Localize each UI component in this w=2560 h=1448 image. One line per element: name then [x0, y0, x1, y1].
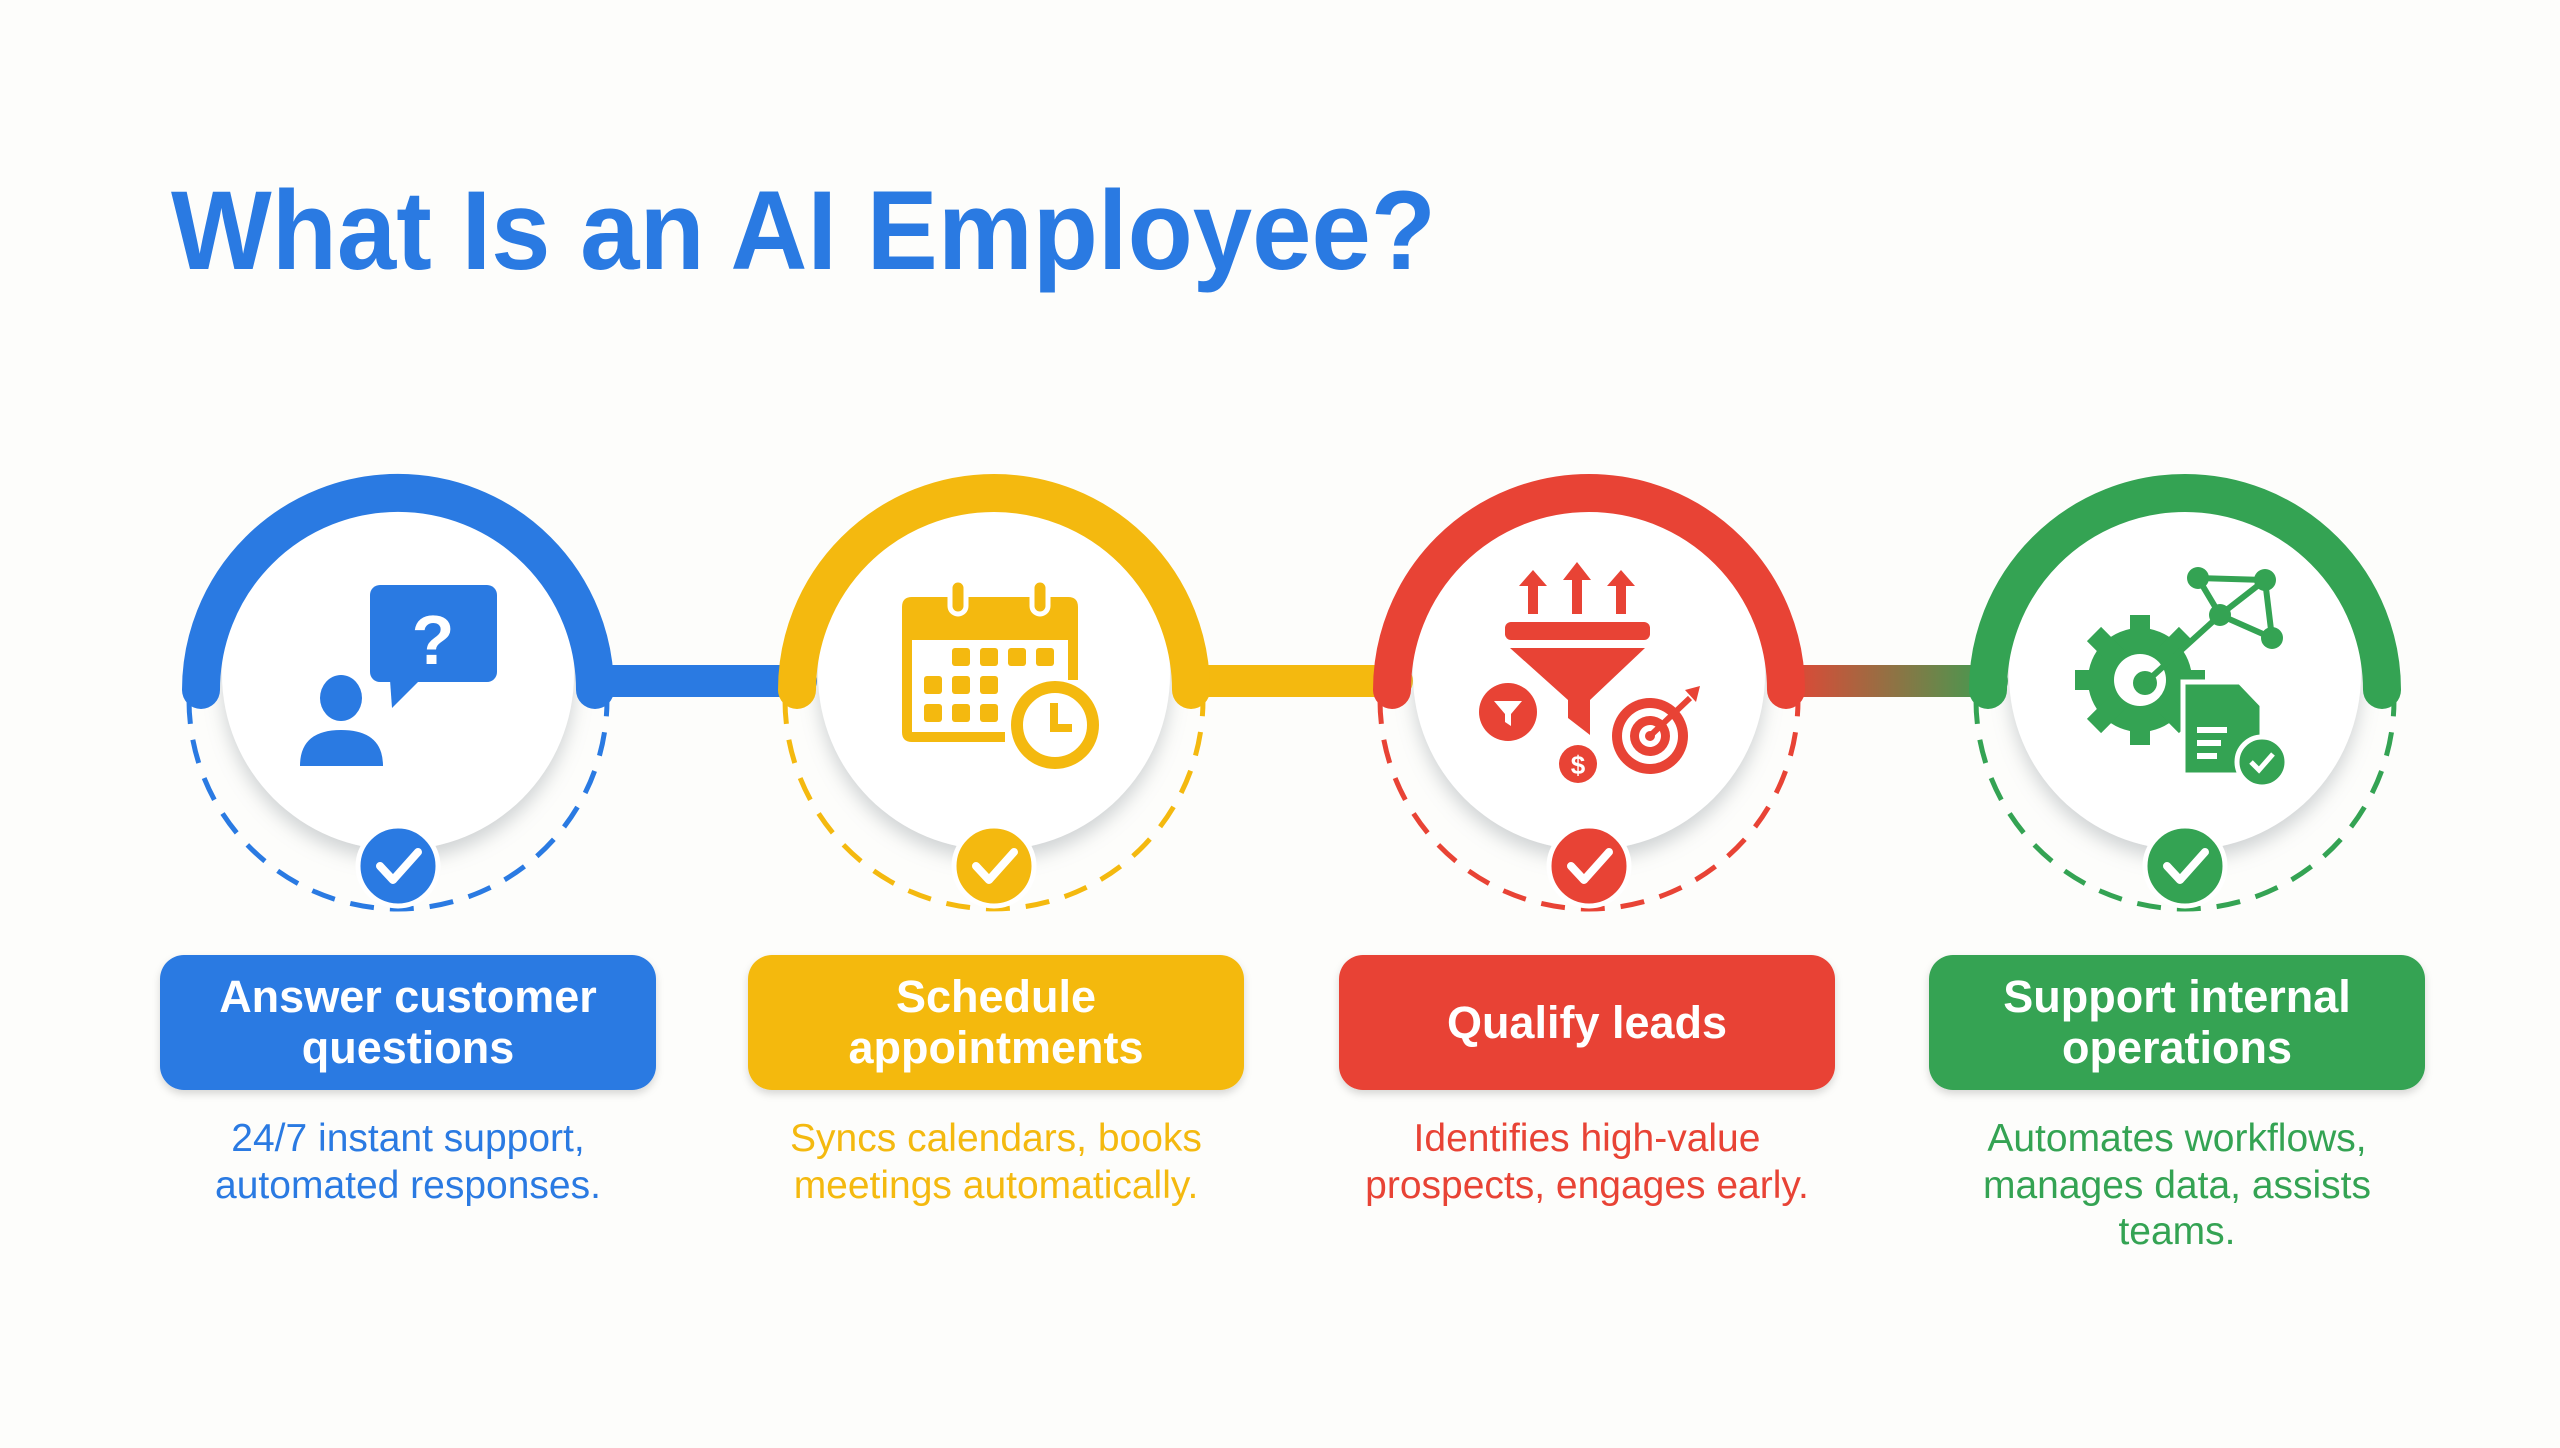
description 3: Identifies high-value	[1414, 1117, 1760, 1160]
description 1: 24/7 instant support,	[231, 1117, 585, 1160]
description 4: manages data, assists	[1983, 1164, 2371, 1207]
step 4: support internal operations	[1976, 493, 2394, 909]
label: answer customer questions: Answer customer	[219, 971, 597, 1022]
connector: blue to yellow	[590, 665, 817, 697]
description 1: automated responses.	[215, 1164, 601, 1207]
label: qualify leads: Qualify leads	[1447, 997, 1727, 1048]
icon: person with question bubble	[300, 585, 497, 766]
description 4	[1983, 1117, 2371, 1253]
icon: gear, network, document	[2075, 567, 2287, 787]
description 2	[790, 1117, 1202, 1207]
description 1	[215, 1117, 601, 1207]
label: answer customer questions	[160, 955, 656, 1090]
description 2: Syncs calendars, books	[790, 1117, 1202, 1160]
label: support internal operations: operations	[2062, 1022, 2292, 1073]
icon: calendar with clock	[902, 580, 1093, 763]
icon: funnel, arrows, target	[1479, 562, 1700, 783]
outer arc	[201, 493, 595, 690]
label: answer customer questions: questions	[302, 1022, 514, 1073]
label: schedule appointments: appointments	[848, 1022, 1144, 1073]
description 3: prospects, engages early.	[1365, 1164, 1809, 1207]
dashed lower arc	[189, 700, 607, 909]
label: support internal operations	[1929, 955, 2425, 1090]
label: schedule appointments	[748, 955, 1244, 1090]
label: qualify leads	[1339, 955, 1835, 1090]
step 3: qualify leads	[1380, 493, 1798, 909]
step 2: schedule appointments	[785, 493, 1203, 909]
icon: person with question bubble: ?	[412, 601, 454, 679]
description 4: teams.	[2118, 1210, 2236, 1253]
description 4: Automates workflows,	[1987, 1117, 2367, 1160]
connector: red to green	[1781, 665, 2008, 697]
step 1: answer customer questions	[189, 493, 607, 909]
check badge	[358, 826, 438, 906]
connector: yellow to red	[1186, 665, 1413, 697]
title: What Is an AI Employee?	[171, 168, 1436, 293]
label: schedule appointments: Schedule	[896, 971, 1096, 1022]
description 2: meetings automatically.	[794, 1164, 1198, 1207]
icon: funnel, arrows, target: $	[1571, 750, 1586, 780]
label: support internal operations: Support internal	[2003, 971, 2351, 1022]
description 3	[1365, 1117, 1809, 1207]
